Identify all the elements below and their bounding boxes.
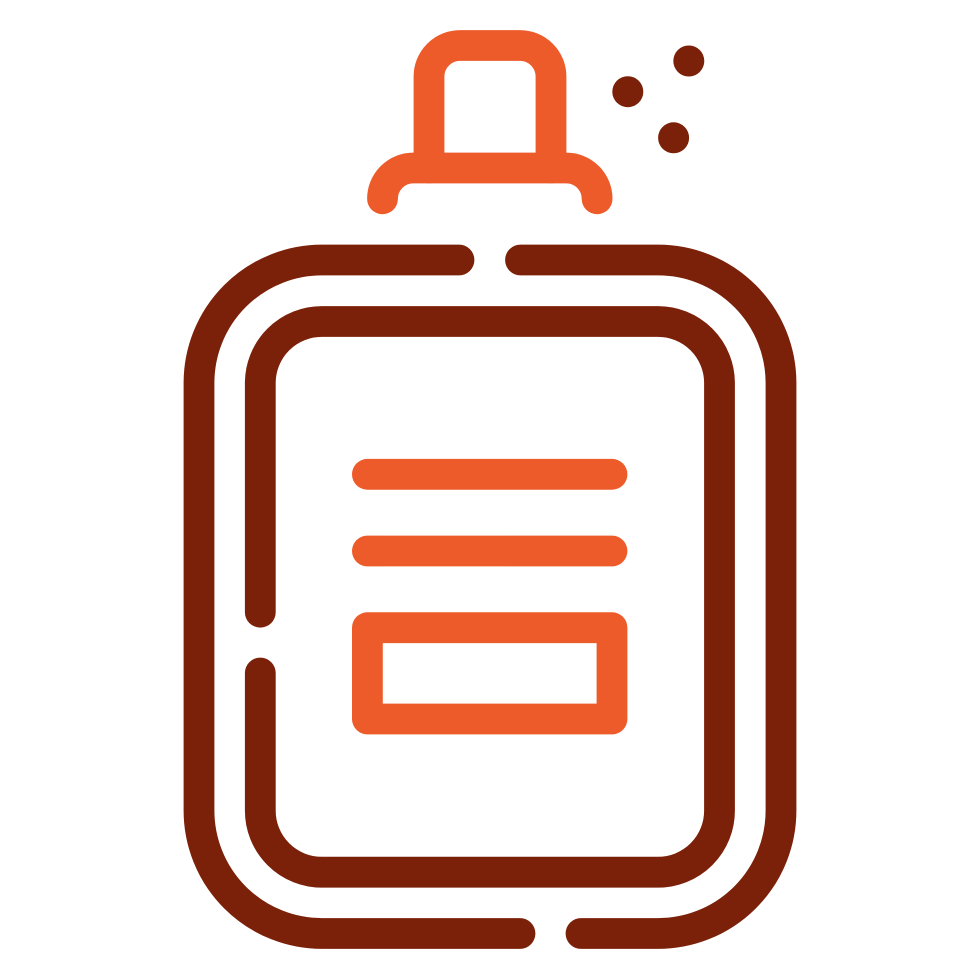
label lines and box bbox=[367, 474, 612, 719]
nozzle cap bbox=[382, 46, 597, 199]
outer bottle outline bbox=[199, 260, 781, 934]
inner bottle outline bbox=[260, 322, 720, 872]
spray droplets bbox=[612, 46, 704, 153]
